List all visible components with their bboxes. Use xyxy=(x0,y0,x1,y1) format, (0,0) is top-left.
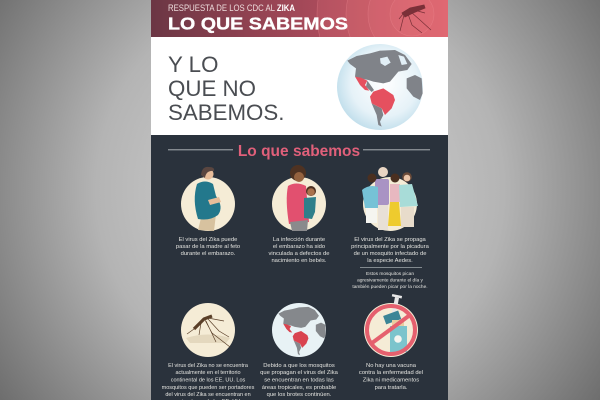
icon: mosquito xyxy=(187,316,230,347)
central america xyxy=(366,81,374,92)
north america xyxy=(278,307,319,328)
note: agresivamente durante el día y xyxy=(357,278,424,284)
globe xyxy=(337,44,423,130)
prohibition sign xyxy=(367,306,415,354)
dark panel xyxy=(151,135,448,400)
header subtitle: RESPUESTA DE LOS CDC AL ZIKA xyxy=(168,3,296,13)
concentric target rings xyxy=(316,0,448,37)
section heading: Lo que sabemos xyxy=(238,143,360,160)
big heading: SABEMOS. xyxy=(168,100,284,125)
text: que los brotes continúen. xyxy=(267,392,332,398)
poster xyxy=(151,0,448,400)
south america south xyxy=(294,340,301,355)
text: actualmente en el territorio xyxy=(175,370,241,376)
text: El virus del Zika puede xyxy=(179,237,237,243)
item: globe xyxy=(260,303,339,398)
south america south xyxy=(372,103,383,127)
item: pregnant woman xyxy=(176,167,240,257)
text: El virus del Zika no se encuentra xyxy=(168,363,249,369)
text: durante el embarazo. xyxy=(181,251,236,257)
item: mosquito xyxy=(162,303,255,400)
text: pasar de la madre al feto xyxy=(176,244,240,250)
big heading: Y LO xyxy=(168,52,218,77)
text: la especie Aedes. xyxy=(367,258,413,264)
header title: LO QUE SABEMOS xyxy=(168,14,348,34)
group of people figure xyxy=(362,167,418,230)
note: también pueden picar por la noche. xyxy=(352,284,428,290)
text: principalmente por la picadura xyxy=(351,244,430,250)
text: nacimiento en bebés. xyxy=(271,258,327,264)
text: vinculada a defectos de xyxy=(269,251,329,257)
north america xyxy=(347,50,412,83)
text: No hay una vacuna xyxy=(366,363,417,369)
mexico highlight xyxy=(283,324,292,333)
icon: mosquito xyxy=(399,5,431,33)
brazil highlight xyxy=(370,88,395,115)
text: el embarazo ha sido xyxy=(273,244,325,250)
text: áreas tropicales, es probable xyxy=(262,385,336,391)
white band xyxy=(151,37,448,135)
text: se encuentran en todas las xyxy=(264,378,334,384)
big heading: QUE NO xyxy=(168,76,256,101)
item: no vaccine xyxy=(359,294,423,391)
item: group of people xyxy=(351,167,430,290)
text: Debido a que los mosquitos xyxy=(263,363,335,369)
brazil highlight xyxy=(293,331,308,348)
icon: medicine box xyxy=(390,320,407,352)
africa and europe xyxy=(316,323,326,338)
text: que propagan el virus del Zika xyxy=(260,370,339,376)
header band xyxy=(151,0,448,37)
mexico highlight xyxy=(355,77,369,91)
text: Zika ni medicamentos xyxy=(363,378,419,384)
note: Estos mosquitos pican xyxy=(366,271,414,277)
text: para tratarla. xyxy=(375,385,408,391)
africa and europe xyxy=(407,75,423,100)
text: de un mosquito infectado de xyxy=(354,251,426,257)
icon: syringe xyxy=(383,294,402,324)
text: mosquitos que pueden ser portadores xyxy=(162,385,255,391)
text: continental de los EE. UU. Los xyxy=(171,378,246,384)
text: La infección durante xyxy=(273,237,325,243)
hudson bay xyxy=(380,55,407,66)
big heading xyxy=(168,52,284,125)
mother and child figure xyxy=(287,165,316,231)
text: del virus del Zika se encuentran en xyxy=(165,392,251,398)
pregnant woman figure xyxy=(195,167,221,231)
text: El virus del Zika se propaga xyxy=(354,237,427,243)
text: contra la enfermedad del xyxy=(359,370,423,376)
item: mother and child xyxy=(269,165,329,264)
